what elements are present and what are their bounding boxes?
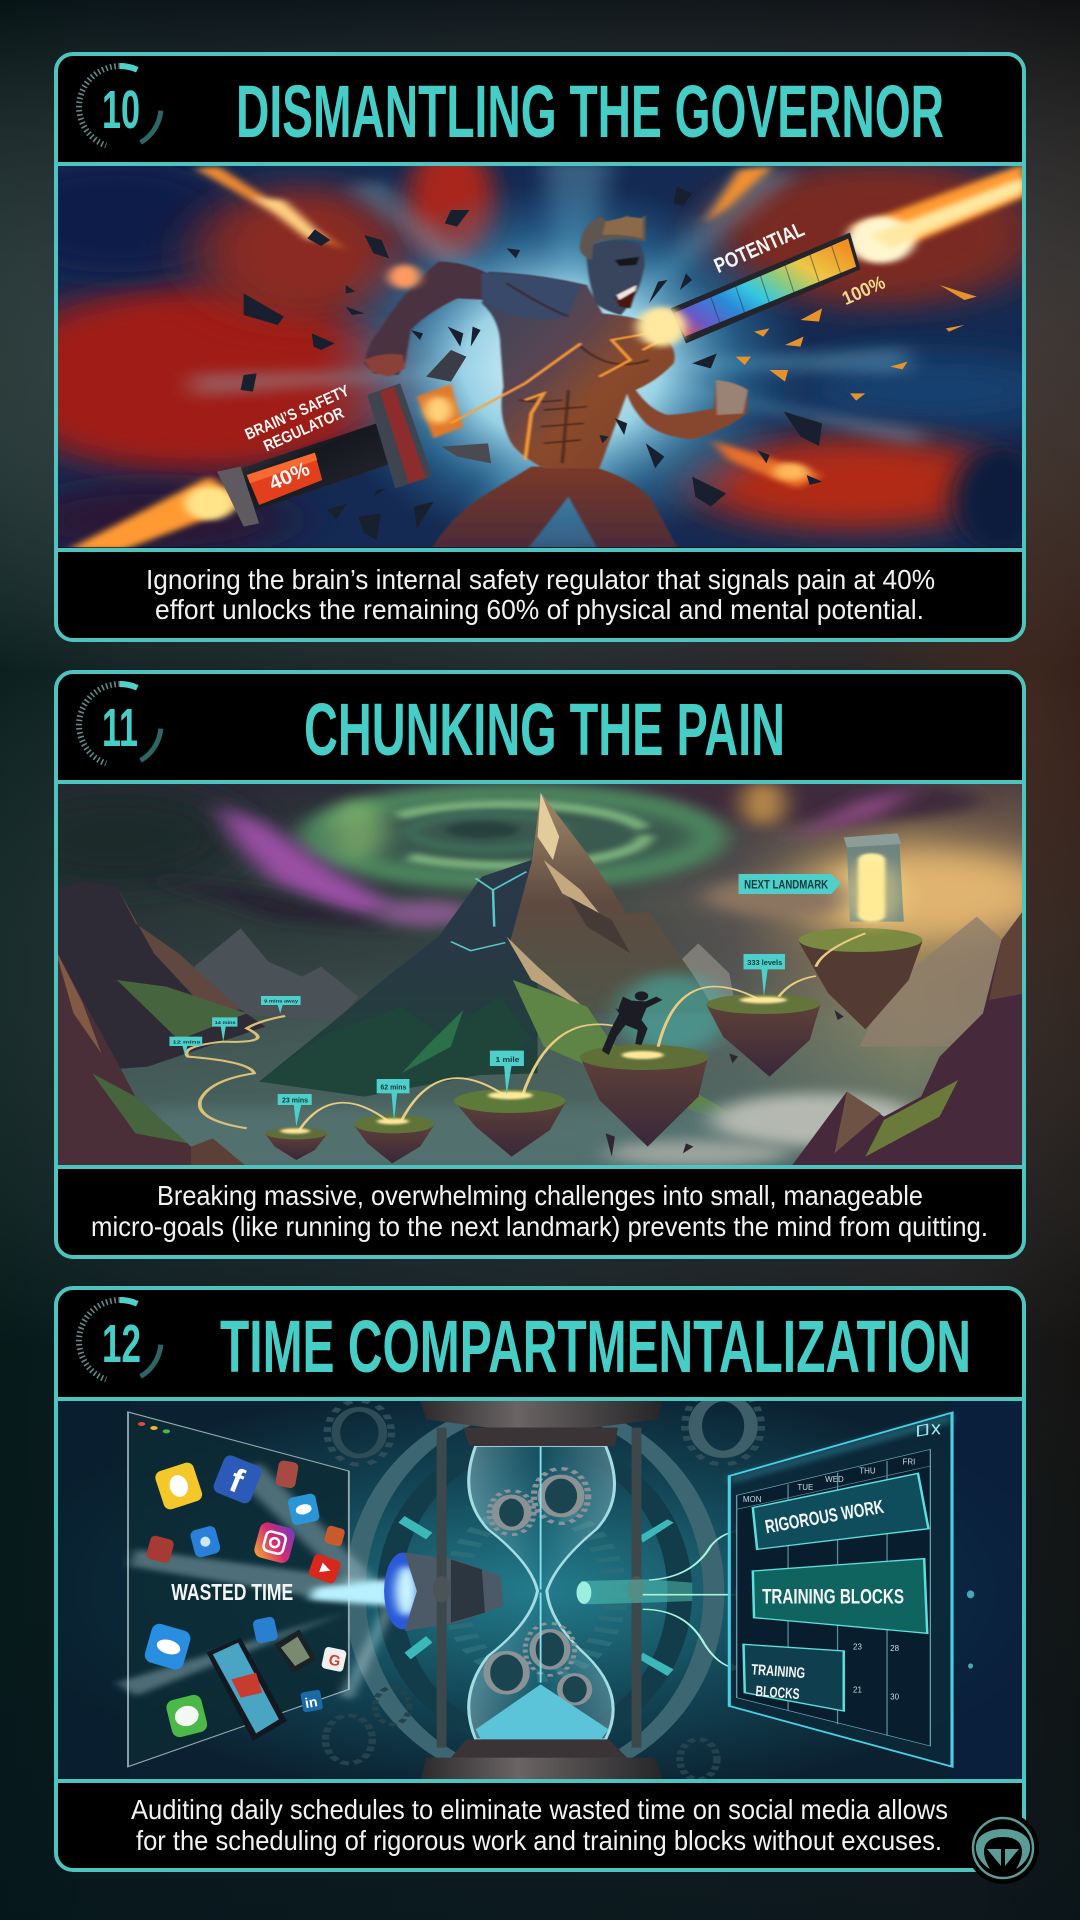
right schedule window [729,1413,952,1767]
gate [841,833,904,927]
hourglass [420,1400,664,1783]
data stream [117,1463,392,1699]
illustration labels: RIGOROUS WORK [764,1497,886,1538]
tag labels: 1 mile [495,1057,520,1064]
right schedule window: 30 [890,1692,900,1701]
gauge labels: 100% [839,272,889,310]
header divider [56,782,1024,1167]
gauge labels [243,218,889,495]
number badge 11 [79,684,161,764]
foreground cliffs [55,908,1025,1170]
landing glows [280,997,787,1134]
right schedule window: TUE [797,1483,813,1492]
fog [148,973,921,1170]
number badge 12 [79,1300,161,1380]
debris shards [241,187,822,540]
right schedule window: WED [825,1475,844,1484]
clock wheel and background gears [325,1388,761,1779]
body text [131,1794,948,1856]
gauge: safety regulator [217,350,491,527]
fire streaks [67,163,1025,550]
illustration labels: TRAINING [751,1661,806,1682]
burst rays [191,160,921,552]
head [586,240,645,315]
number badge 10: 10 [102,80,140,140]
illustration labels: WASTED TIME [171,1579,293,1605]
number badge 11: 11 [102,698,138,758]
illustration: hourglass converting wasted time into scheduled blocks [58,1401,1022,1779]
glow and window controls [729,1413,974,1669]
header divider [56,164,1024,550]
storm clouds [0,777,1057,937]
left browser window [128,1412,349,1767]
output nozzle and arrows [576,1525,750,1673]
intake nozzle [384,1553,504,1631]
floating islands [265,928,922,1163]
illustration labels [171,1497,904,1703]
gauge labels: REGULATOR [261,405,347,455]
tag labels: 14 mins [215,1020,236,1026]
header divider [56,1399,1024,1781]
illustration: man breaking the safety regulator [58,166,1022,548]
logo emblem [967,1812,1039,1884]
social app icons: in [304,1693,319,1711]
abs and muscle lines [507,283,649,463]
right schedule window: MON [743,1495,762,1504]
body text: Breaking massive, overwhelming challenges into small, manageable [157,1180,923,1211]
body text: micro-goals (like running to the next landmark) prevents the mind from quitting. [91,1211,988,1242]
main peak [259,793,754,1127]
hourglass frame [437,1428,447,1748]
upper and lower gears [487,1469,589,1704]
right schedule window: 28 [890,1644,900,1653]
number badge 10 [79,66,161,146]
gauge labels: 40% [266,458,313,495]
social app icons: G [327,1651,342,1670]
right schedule window: 23 [853,1642,862,1651]
gauge labels: BRAIN’S SAFETY [243,382,352,444]
tag labels: 333 levels [747,960,782,967]
number badge 12: 12 [102,1314,141,1374]
tag labels [173,878,828,1105]
distance tags [169,874,841,1127]
gauge labels: POTENTIAL [711,218,808,278]
illustration labels: TRAINING BLOCKS [762,1585,904,1608]
panel border [56,1288,1024,1870]
distant mountains [55,882,1025,1073]
social app icons: f [224,1461,249,1501]
illustration labels: BLOCKS [755,1683,800,1703]
right schedule window: FRI [903,1457,915,1466]
body text: Auditing daily schedules to eliminate wasted time on social media allows [131,1794,948,1825]
panel: chunking the pain [0,672,1057,1257]
tag labels: 62 mins [380,1084,406,1091]
panel border [56,672,1024,1257]
right schedule window: THU [859,1466,876,1475]
runner [602,991,662,1055]
tag labels: 23 mins [282,1098,308,1105]
golden path arcs [186,933,865,1130]
title: CHUNKING THE PAIN [304,688,785,771]
body text: effort unlocks the remaining 60% of physical and mental potential. [155,594,924,625]
social app icons [143,1453,347,1741]
body text: for the scheduling of rigorous work and training blocks without excuses. [136,1825,942,1856]
illustration: floating islands toward next landmark [58,784,1022,1165]
panel border [56,54,1024,640]
panel: dismantling the governor [0,54,1070,640]
gauge: potential [671,233,860,343]
body text [146,564,935,625]
panel: time compartmentalization [55,1288,1025,1870]
man [364,215,748,552]
right schedule window: 21 [853,1686,862,1695]
tag labels: 12 mins [173,1039,201,1045]
lightning [451,333,674,460]
body text [91,1180,988,1242]
tag labels: NEXT LANDMARK [744,878,828,892]
tag labels: 9 mins away [264,998,298,1004]
body text: Ignoring the brain’s internal safety regulator that signals pain at 40% [146,564,935,595]
schedule blocks [744,1473,928,1711]
